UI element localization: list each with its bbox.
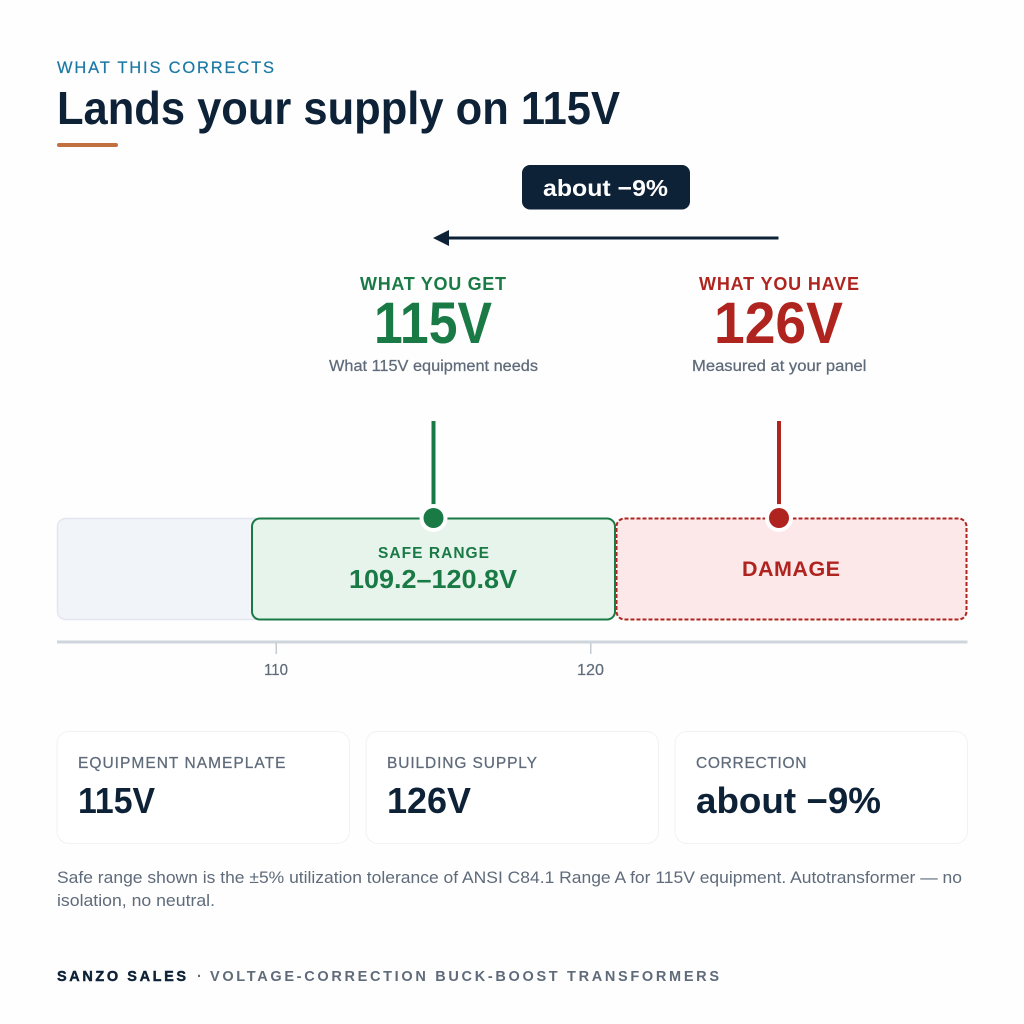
footnote: isolation, no neutral. [57, 892, 215, 910]
footnote [57, 869, 962, 910]
footer: · [197, 969, 202, 985]
voltage scale [57, 421, 968, 679]
caption: Measured at your panel [692, 358, 866, 375]
readout: what you get [329, 274, 538, 375]
safe zone [252, 518, 615, 620]
card: equipment nameplate: EQUIPMENT NAMEPLATE [78, 755, 286, 772]
card: correction: about −9% [696, 780, 881, 821]
header [57, 59, 620, 147]
axis: 110 [264, 662, 288, 679]
caption: What 115V equipment needs [329, 358, 538, 375]
card: equipment nameplate: 115V [78, 780, 155, 821]
card: equipment nameplate [57, 732, 350, 844]
safe zone: 109.2–120.8V [349, 564, 518, 594]
axis [57, 640, 968, 679]
value: 126V [714, 291, 843, 356]
damage zone: DAMAGE [742, 557, 840, 581]
footer: VOLTAGE-CORRECTION BUCK-BOOST TRANSFORMERS [210, 969, 719, 985]
accent rule [57, 143, 118, 147]
value: 115V [374, 291, 492, 356]
marker: 126V [765, 421, 793, 532]
correction badge: about −9% [543, 175, 668, 201]
damage zone [616, 518, 966, 620]
label: WHAT YOU GET [360, 274, 506, 294]
card: building supply [366, 732, 658, 844]
low zone [58, 518, 262, 620]
safe zone: SAFE RANGE [378, 545, 489, 562]
marker: 115V [420, 421, 448, 532]
title: Lands your supply on 115V [57, 82, 620, 134]
label: WHAT YOU HAVE [699, 274, 859, 294]
eyebrow: WHAT THIS CORRECTS [57, 59, 274, 77]
card: correction: CORRECTION [696, 755, 806, 772]
arrow: from 126V to 115V [433, 230, 778, 246]
card: building supply: 126V [387, 780, 471, 821]
card: correction [675, 732, 968, 844]
correction badge [522, 165, 690, 210]
footer: SANZO SALES [57, 969, 186, 985]
readout: what you have [692, 274, 866, 375]
footnote: Safe range shown is the ±5% utilization tolerance of ANSI C84.1 Range A for 115V equipment. Autotransformer — no [57, 869, 962, 887]
axis: 120 [577, 662, 604, 679]
card: building supply: BUILDING SUPPLY [387, 755, 537, 772]
